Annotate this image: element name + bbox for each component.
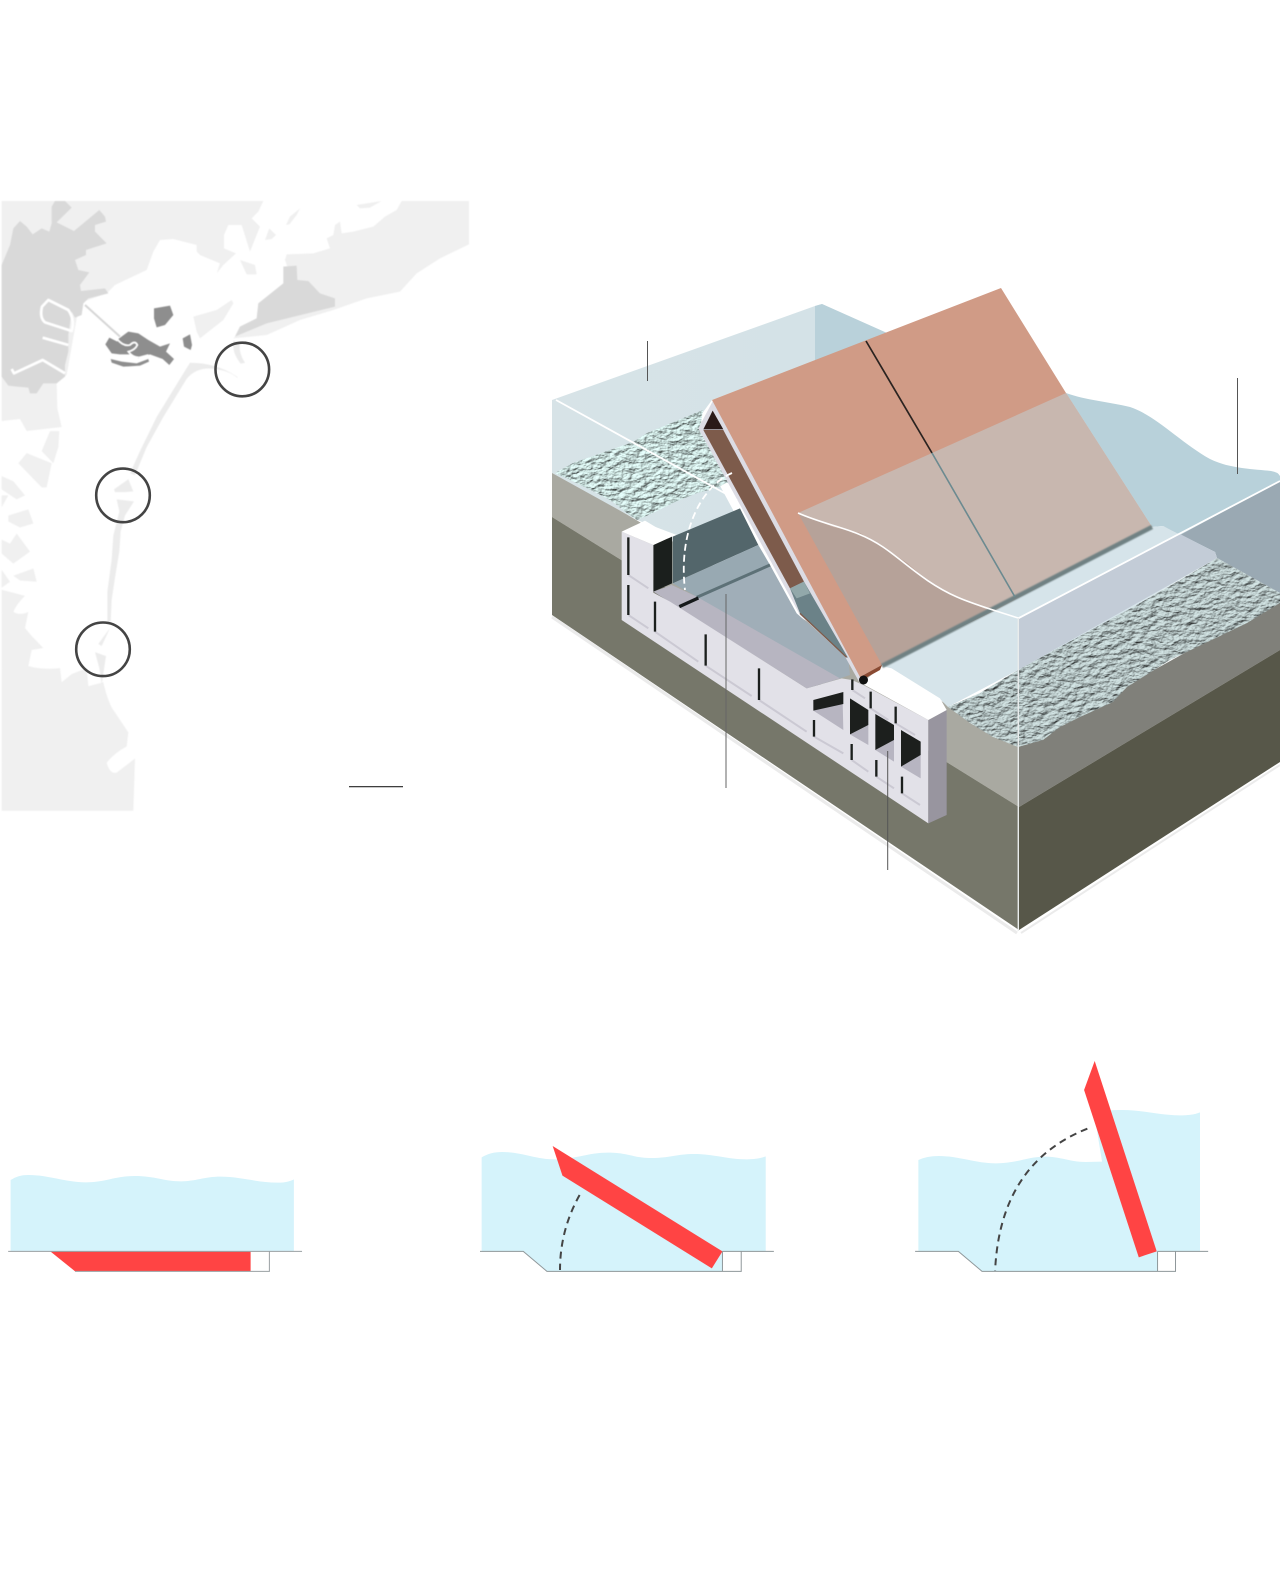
- concrete caisson housing: [622, 508, 947, 823]
- gate inner teal: [790, 582, 848, 658]
- seabed wall right: [1163, 481, 1280, 593]
- gravel seabed: right: [948, 558, 1280, 747]
- housing outline: [915, 1251, 1208, 1271]
- caisson rear ledge: [673, 545, 770, 597]
- gate pivot: [859, 665, 882, 684]
- urban canals: [12, 300, 73, 373]
- gate edge: [698, 400, 867, 683]
- land: small marsh islands: [193, 201, 382, 338]
- caisson end face: [928, 710, 947, 823]
- caisson back wall: [673, 508, 758, 583]
- dark opening: [653, 537, 672, 592]
- leader line: sea level: [646, 341, 648, 381]
- gate inner brown: [703, 430, 804, 588]
- gate: hollow underside: [698, 400, 867, 683]
- leader line: lagoon level: [1236, 378, 1238, 474]
- gravel seabed: left: [555, 410, 745, 520]
- map: northern mainland: [2, 201, 469, 431]
- water box edge: right: [1018, 481, 1280, 618]
- step 3: gate raised: [915, 1061, 1208, 1271]
- caisson top right: [862, 666, 947, 720]
- water surface outline on gate: [798, 513, 1018, 618]
- gate: submerged part above waterline: [798, 393, 1152, 612]
- water level low: [11, 1175, 294, 1251]
- ground block: left face: [552, 470, 1019, 933]
- inlet marker: Lido: [216, 343, 269, 396]
- gate base shadow: [882, 527, 1152, 666]
- Venice canal: [117, 339, 148, 357]
- map of the lagoon: [2, 201, 469, 811]
- ribs: shadow lines: [628, 575, 920, 805]
- land: southern mainland: [2, 590, 135, 811]
- water box edge: corner: [1017, 618, 1019, 931]
- swing path: [560, 1195, 580, 1270]
- gate inclined: [553, 1146, 722, 1268]
- gate inner dark apex: [703, 411, 723, 429]
- water behind gate with wave surface: [1066, 393, 1280, 535]
- housing outline: [8, 1251, 302, 1271]
- Lido urban area: [235, 266, 335, 337]
- map: southern lagoon: [2, 341, 245, 811]
- strip under front water face: [1018, 534, 1217, 670]
- Venice island group: [105, 306, 192, 367]
- water body: left wall: [552, 304, 887, 560]
- gate joint below water: [932, 453, 1015, 597]
- caisson top left: [622, 521, 672, 545]
- inlet marker: Malamocco: [96, 469, 150, 522]
- map scale bar: [349, 786, 403, 788]
- barrier islands: [95, 341, 245, 684]
- housing outline: [480, 1251, 774, 1271]
- gate joint above water: [866, 341, 932, 453]
- gate flat in housing: [51, 1252, 251, 1271]
- step 1: gate at rest: [8, 1175, 302, 1271]
- leader line: service tunnel: [887, 751, 889, 870]
- gate swing path dashed arc: [684, 473, 732, 590]
- ground block: right face: [1019, 600, 1280, 933]
- caisson mauve sill: [653, 585, 840, 688]
- water box edge: left: [556, 400, 737, 500]
- land: north-west: [2, 201, 263, 431]
- leader line: housing: [725, 594, 727, 788]
- gate upright: [1084, 1061, 1157, 1257]
- swing path: [995, 1129, 1087, 1271]
- step 2: gate rising: [480, 1146, 774, 1271]
- caisson front face: [622, 532, 928, 823]
- water level sea side high: [918, 1110, 1200, 1271]
- caisson floor: [697, 565, 850, 688]
- land: north-east coast: [233, 201, 469, 338]
- inlet marker: Chioggia: [76, 622, 130, 676]
- gate: submerged part below waterline: [798, 513, 992, 665]
- service tunnels: [813, 692, 921, 778]
- cutaway of the barrier gate: [552, 288, 1280, 933]
- operating sequence diagrams: [8, 1061, 1208, 1271]
- slot groove dark end: [679, 598, 698, 607]
- city of Mestre urban area: [2, 201, 108, 393]
- gate: top salmon plate: [712, 288, 1152, 677]
- causeway to Venice: [85, 305, 120, 337]
- light strip along sill: [880, 526, 1217, 707]
- ribs: dark slots: [628, 537, 902, 793]
- water body: back wall: [815, 304, 887, 365]
- gate lower brown seam: [800, 613, 847, 657]
- gate teal highlight: [790, 582, 810, 598]
- water level medium: [482, 1152, 766, 1271]
- land: western marsh patches: [2, 431, 59, 588]
- slot groove: [697, 565, 770, 597]
